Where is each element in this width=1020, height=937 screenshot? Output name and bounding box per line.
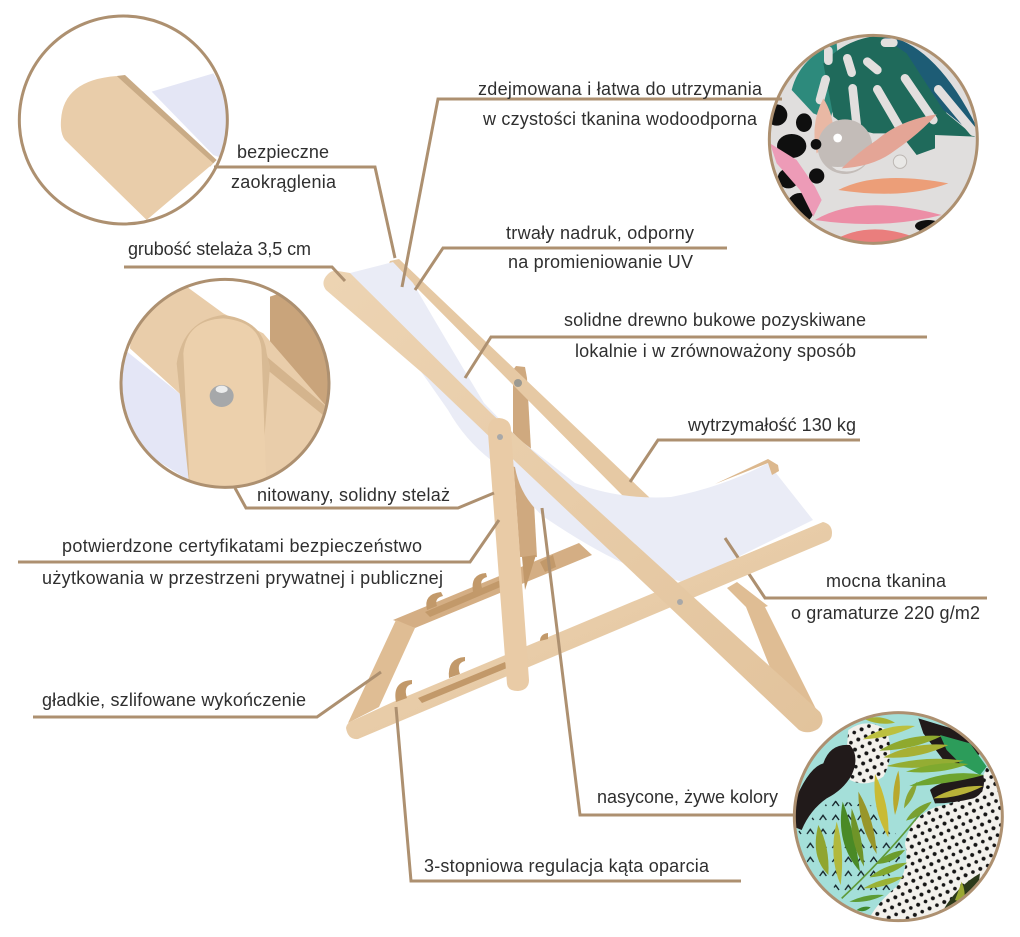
- circle: waterproof fabric swatch: [768, 34, 979, 245]
- wood side edge: [117, 75, 217, 167]
- circle: rounded corner detail: [19, 16, 230, 224]
- circle: vivid colors fabric swatch: [792, 711, 1004, 922]
- black blob left: [793, 745, 855, 830]
- rear base rail with notches: [393, 543, 592, 628]
- line: removable fabric: [402, 99, 782, 287]
- fabric corner: [152, 73, 230, 160]
- callout lines: [18, 99, 927, 881]
- orange leaf: [838, 178, 948, 194]
- rounded wood end: [61, 76, 213, 220]
- label: smooth finish: gładkie, szlifowane wykończenie: [42, 690, 306, 710]
- back rail: [388, 259, 650, 498]
- droplet glint: [833, 134, 842, 142]
- fabric: [122, 352, 188, 479]
- rear vertical wood: [270, 294, 328, 405]
- label: fabric weight: [791, 571, 980, 623]
- line: beech wood: [465, 337, 927, 378]
- bottom right yellow leaf: [955, 882, 965, 903]
- water droplet: [818, 119, 872, 174]
- label: UV print: trwały nadruk, odporny: [506, 223, 694, 243]
- monstera leaf blue edge: [884, 38, 976, 128]
- brace behind long leg: [522, 555, 536, 590]
- leg shadow: [177, 315, 270, 493]
- leg: [183, 318, 267, 493]
- black dots: [766, 104, 942, 232]
- small droplet: [893, 155, 907, 168]
- callout line: fabric weight: [725, 538, 987, 598]
- label: vivid colors: nasycone, żywe kolory: [597, 787, 778, 807]
- rivet: crossing: [677, 599, 683, 605]
- long front leg: [488, 418, 529, 691]
- hook: lower rail 1: [395, 680, 412, 702]
- notch block: [540, 555, 556, 572]
- ring: [794, 713, 1002, 921]
- label: frame thickness: grubość stelaża 3,5 cm: [128, 239, 311, 259]
- line: vivid colors: [542, 508, 795, 815]
- label: rounded corners: bezpieczne: [237, 142, 329, 162]
- hook: rear rail 1: [426, 592, 443, 610]
- ring: [769, 35, 977, 243]
- line: certificates: [18, 520, 499, 562]
- label: fabric weight: o gramaturze 220 g/m2: [791, 603, 980, 623]
- pink leaf: [815, 205, 942, 224]
- leaf slits: [820, 43, 973, 132]
- rivet highlight: [216, 386, 228, 393]
- peach leaf upright: [814, 98, 833, 153]
- hook: lower rail 3: [540, 633, 548, 641]
- label: removable fabric: w czystości tkanina wodoodporna: [482, 109, 758, 129]
- label: riveted frame: nitowany, solidny stelaż: [257, 485, 450, 505]
- main front rail: [323, 271, 823, 732]
- monstera leaf body: [823, 35, 975, 155]
- black blob right: [930, 775, 984, 803]
- salmon leaf: [841, 229, 910, 242]
- label: removable fabric: zdejmowana i łatwa do utrzymania: [478, 79, 763, 99]
- palm leaves lower: [816, 771, 932, 911]
- label: fabric weight: mocna tkanina: [826, 571, 947, 591]
- line: UV print: [415, 248, 727, 290]
- dotted patch top: [847, 723, 890, 783]
- pink fern: [770, 143, 822, 217]
- right rear leg: [727, 582, 820, 717]
- text labels: [42, 79, 980, 876]
- canvas: [796, 714, 992, 916]
- label: rounded corners: [231, 142, 337, 192]
- palm leaves upper: [863, 717, 984, 798]
- rear vertical support: [513, 366, 537, 557]
- hook: lower rail 2: [449, 657, 465, 678]
- hook: rear rail 2: [473, 573, 487, 592]
- label: beech wood: solidne drewno bukowe pozyskiwane: [564, 310, 866, 330]
- upper seat bar: [715, 459, 779, 484]
- label: UV print: na promieniowanie UV: [508, 252, 693, 272]
- black blob top: [918, 718, 980, 767]
- line: strength: [630, 440, 860, 482]
- palm stem: [841, 814, 922, 899]
- lower base rail: [346, 522, 832, 739]
- droplet light: [832, 165, 864, 172]
- chair: deckchair illustration: [323, 259, 987, 739]
- rivet: top: [514, 379, 522, 387]
- circle: rivet detail: [113, 279, 333, 500]
- line: riveted frame: [235, 488, 494, 508]
- line: rounded corners: [214, 167, 395, 258]
- seat fabric: [350, 262, 813, 583]
- chevron area: [797, 800, 903, 897]
- label: certificates: [42, 536, 443, 588]
- canvas: [770, 37, 976, 236]
- notch strip: rear rail: [425, 574, 517, 617]
- line: frame thickness: [124, 267, 345, 281]
- label: beech wood: lokalnie i w zrównoważony sposób: [575, 341, 856, 361]
- line: smooth finish: [33, 672, 381, 717]
- label: strength: wytrzymałość 130 kg: [687, 415, 856, 435]
- label: certificates: użytkowania w przestrzeni prywatnej i publicznej: [42, 568, 443, 588]
- label: rounded corners: zaokrąglenia: [231, 172, 337, 192]
- dotted patch main: [871, 766, 1001, 920]
- rivet: leg: [497, 434, 503, 440]
- label: removable fabric: [478, 79, 763, 129]
- label: beech wood: [564, 310, 866, 361]
- label: adjustment: 3-stopniowa regulacja kąta oparcia: [424, 856, 710, 876]
- left slanted crossbar: [348, 620, 415, 723]
- label: certificates: potwierdzone certyfikatami bezpieczeństwo: [62, 536, 422, 556]
- peach leaf: [842, 114, 937, 168]
- ring: [121, 279, 329, 487]
- ring: [19, 16, 227, 224]
- frame rail: [130, 288, 326, 478]
- rail edge: [268, 358, 325, 414]
- rivet: [210, 385, 234, 407]
- bottom right leaf: [943, 873, 980, 917]
- notch strip: lower rail: [418, 662, 507, 703]
- line: adjustment: [396, 707, 741, 881]
- label: UV print: [506, 223, 694, 272]
- green leaf cluster: [940, 735, 987, 775]
- monstera leaf left lobe: [792, 43, 840, 120]
